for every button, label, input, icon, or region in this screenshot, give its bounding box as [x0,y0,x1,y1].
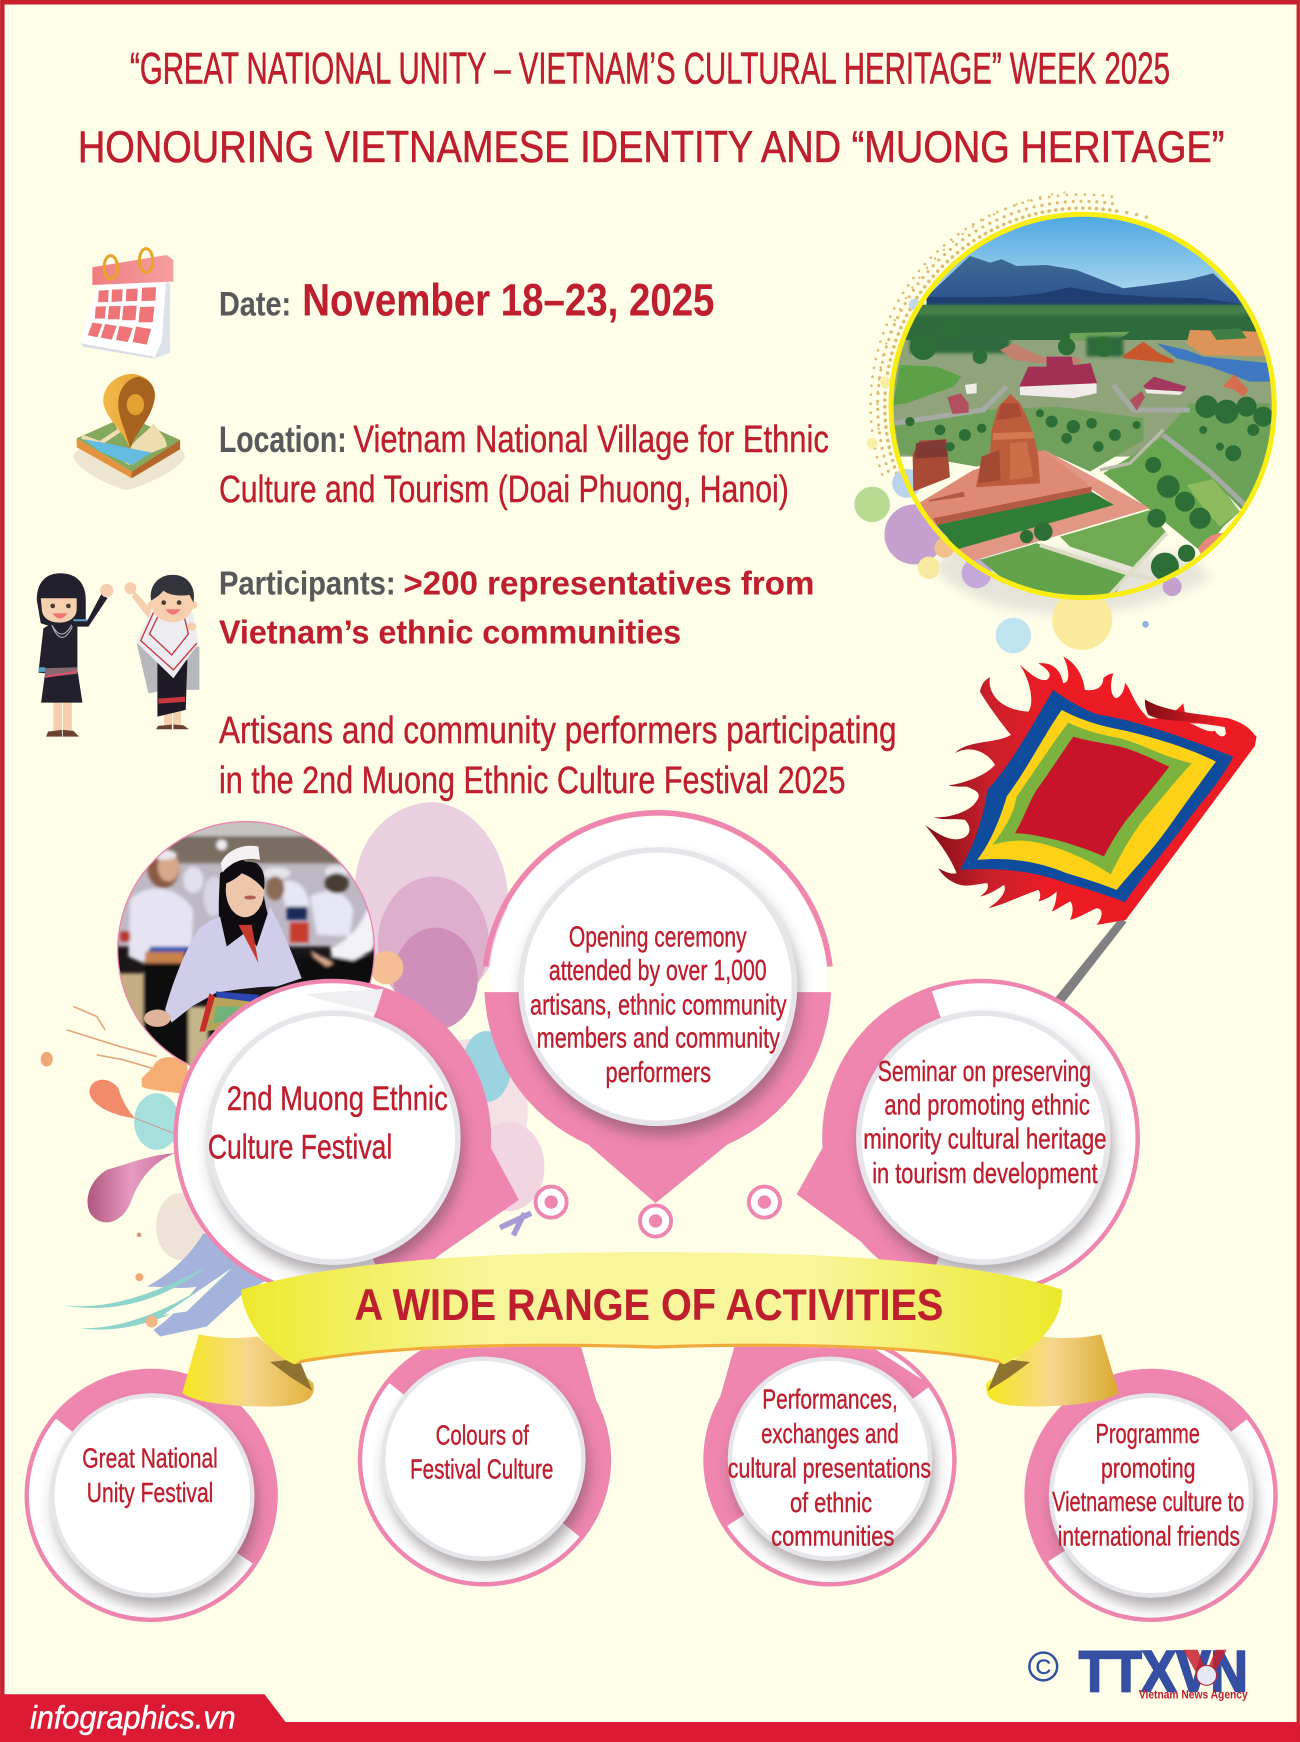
icon: two people in ethnic costume [37,573,199,737]
flag fold [1145,699,1256,739]
text: colours [410,1419,553,1485]
text: great national [82,1443,218,1508]
text: festival: Culture Festival [208,1129,392,1167]
activity circle: Seminar [797,981,1138,1294]
text: opening ceremony: attended by over 1,000 [549,955,767,987]
text: participants: Vietnam’s ethnic communities [219,614,681,651]
figure: woman [37,573,113,737]
text: seminar: Seminar on preserving [878,1056,1091,1088]
text: programme [1052,1418,1244,1551]
mid lawns [895,407,1143,472]
text: location [219,419,829,511]
icon: calendar [80,249,173,359]
icon: flag pole [1056,918,1127,1002]
text: performances: of ethnic [790,1487,872,1518]
footer site name: infographics.vn [30,1700,236,1736]
brick paths and plaza [957,449,1150,562]
ribbon tail: left [182,1334,314,1406]
buildings [1000,343,1083,367]
text: performances: Performances, [762,1384,898,1415]
text: festival [208,1080,448,1167]
text: great national: Great National [82,1443,218,1474]
text: programme: Programme [1095,1418,1200,1449]
text: location: Culture and Tourism (Doai Phuong, Hanoi) [219,469,789,511]
logo: TTXVN Vietnam News Agency: C [1036,1656,1051,1679]
icon: five-colour Muong festival flag [925,657,1257,925]
text: festival: 2nd Muong Ethnic [227,1080,448,1118]
roads [895,385,1247,507]
text: opening ceremony: Opening ceremony [569,922,747,954]
text: participants: >200 representatives from [403,565,814,602]
banner heading: A WIDE RANGE OF ACTIVITIES [354,1281,943,1330]
text: programme: international friends [1058,1520,1240,1551]
decoration: pale pink petals [355,802,544,1235]
text: location: Vietnam National Village for Ethnic [353,419,829,461]
text: artisans: in the 2nd Muong Ethnic Culture Festival 2025 [219,760,846,802]
decoration: paint splashes [41,1007,273,1336]
icon: location pin on map [73,374,185,490]
text: programme: promoting [1101,1453,1195,1484]
text: performances [728,1384,931,1551]
text: performances: cultural presentations [728,1453,931,1484]
activity circle: Programme promoting Vietnamese culture [1026,1371,1275,1620]
text: seminar: in tourism development [872,1158,1098,1190]
ribbon tail: right [986,1334,1119,1406]
activity circle: 2nd Muong Ethnic Culture Festival [176,981,519,1294]
text: date: November 18–23, 2025 [302,275,714,326]
lake and orange bank [1187,330,1270,357]
text: opening ceremony: artisans, ethnic community [530,989,787,1021]
text: seminar: minority cultural heritage [863,1124,1107,1156]
figure: man [124,575,199,729]
activity circle: Colours of Festival Culture [360,1335,610,1584]
text: participants [219,565,814,651]
title [78,44,1224,172]
text: artisans [219,710,897,802]
activity circle: Performances [704,1335,954,1584]
text: opening ceremony: members and community [537,1023,780,1055]
text: performances: communities [771,1520,894,1551]
text: date: Date: [219,286,291,324]
logo: TTXVN Vietnam News Agency: TTXVN [1079,1640,1248,1704]
text: participants: Participants: [219,565,396,602]
map pin [103,374,155,449]
banner ribbon [182,1252,1119,1406]
text: great national: Unity Festival [87,1477,213,1508]
footer bar [0,1694,1300,1742]
temple tower [976,394,1040,487]
text: opening ceremony [530,922,787,1089]
icon: connector dots [536,1187,780,1237]
text: location: Location: [219,419,347,460]
text: seminar: and promoting ethnic [884,1089,1090,1121]
text: colours: Colours of [436,1419,529,1450]
activity circle: Opening ceremony [484,813,831,1203]
text: artisans: Artisans and community performers participating [219,710,897,752]
trees [905,320,1273,581]
decoration: gold dots and coloured bubbles around village photo [854,192,1211,653]
text: performances: exchanges and [761,1418,899,1449]
photo: Vietnam National Village aerial view [890,213,1277,598]
left lawn [893,365,962,405]
text: colours: Festival Culture [410,1454,553,1485]
text: seminar [863,1056,1107,1190]
logo: TTXVN Vietnam News Agency: Vietnam News Agency [1139,1689,1248,1702]
text: opening ceremony: performers [606,1057,711,1089]
activity circle: Great National Unity Festival [27,1370,277,1620]
photo: Muong dancers [117,820,377,1080]
